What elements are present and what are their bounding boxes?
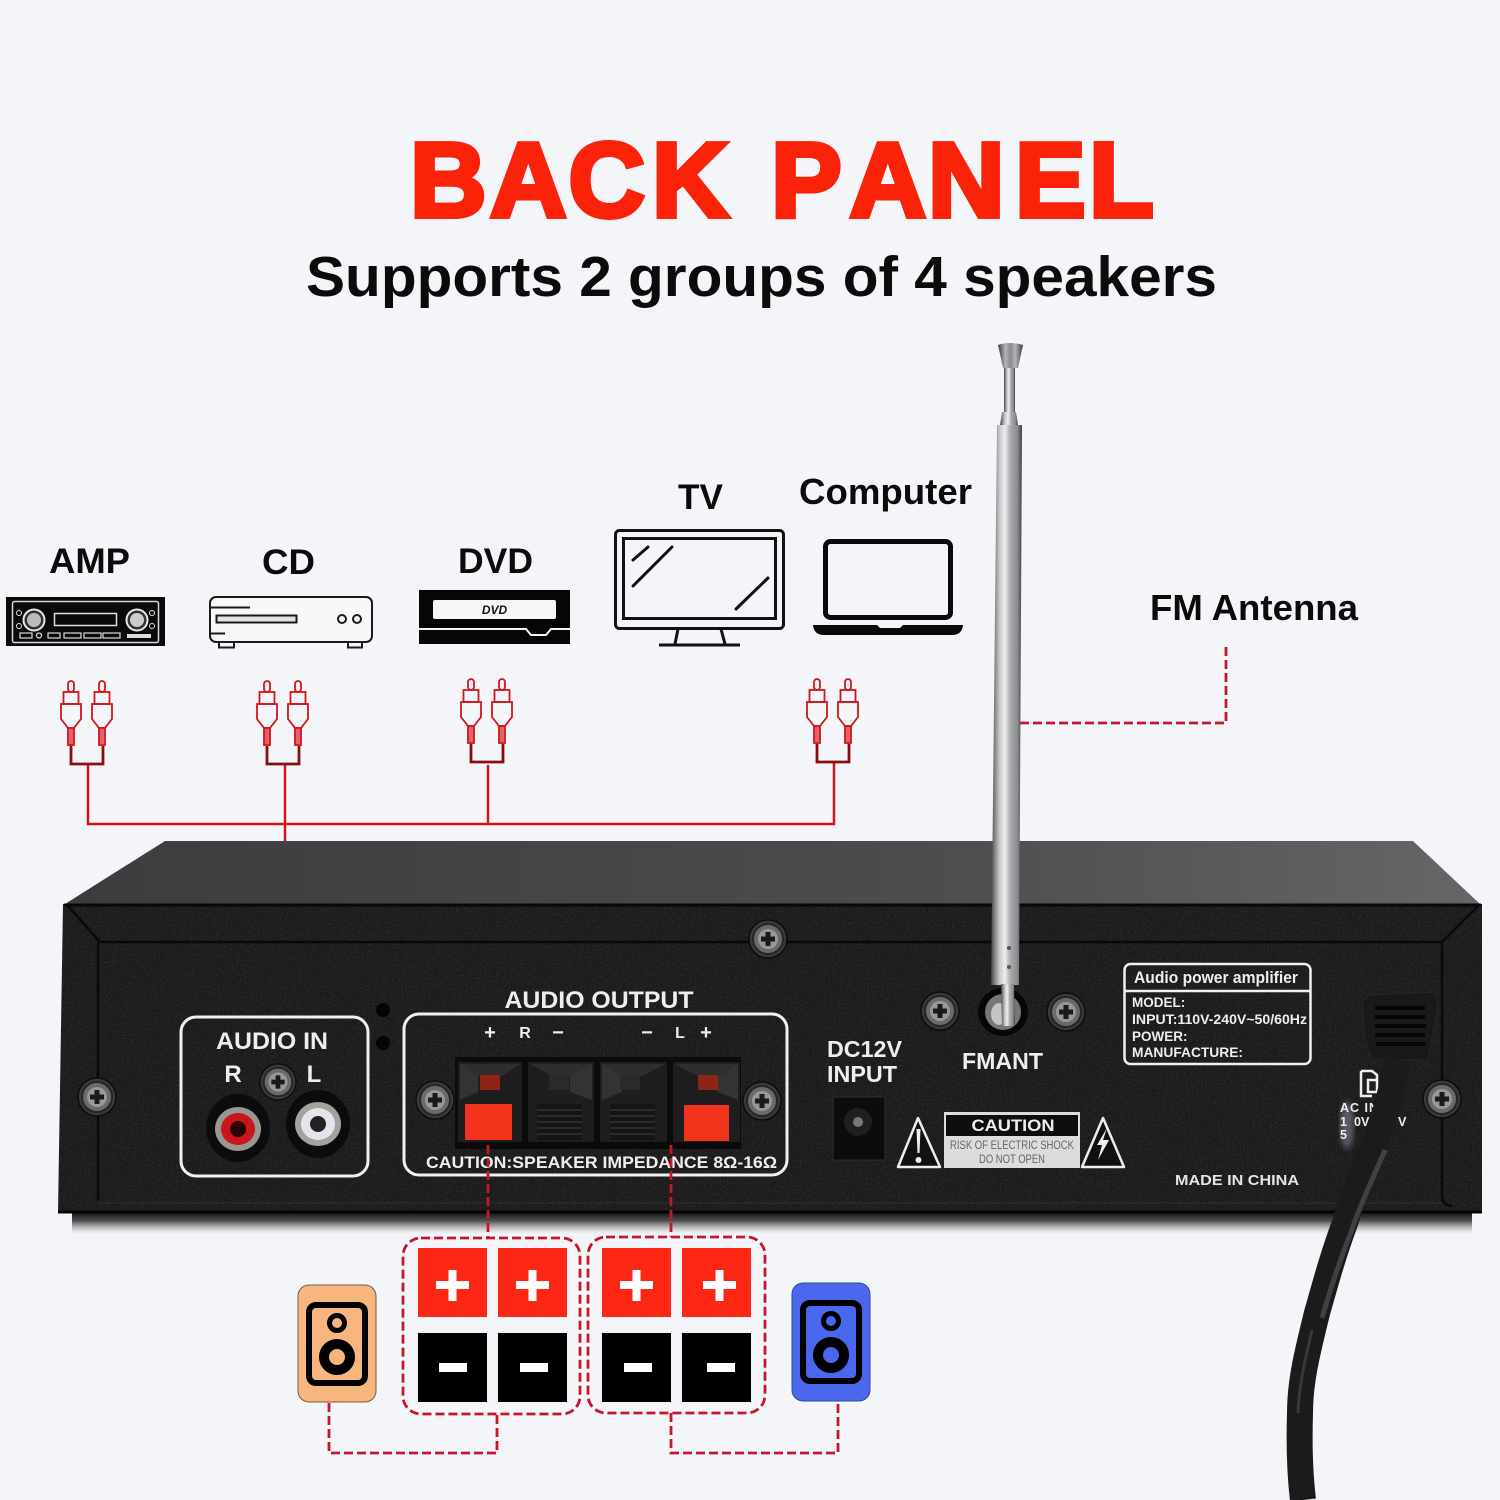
icon: DVD player [419,590,570,644]
panel: audio output: + [700,1022,712,1044]
amplifier rear panel [58,841,1482,1234]
icon: AMP receiver [6,597,165,646]
DC input: INPUT [827,1061,897,1087]
panel: audio output: CAUTION:SPEAKER IMPEDANCE 8Ω-16Ω [426,1153,777,1172]
AC input marking: 0V [1354,1115,1370,1129]
panel: audio output: L [675,1025,685,1042]
DC input [827,1036,903,1160]
FM antenna label: FMANT [962,1048,1043,1074]
AC input marking: 5 [1340,1128,1347,1142]
speaker terminal block [455,1057,741,1149]
dashed: terminal to polarity groups [488,1145,671,1237]
screws [78,920,1461,1120]
icon: laptop [813,542,963,635]
icon: blue speaker [792,1283,870,1401]
label: AMP: AMP [49,542,130,581]
AC input marking: V [1398,1115,1407,1129]
panel: audio in [181,1017,368,1176]
spec label: INPUT:110V-240V~50/60Hz [1132,1012,1307,1027]
icon: RCA plugs CD [257,681,308,745]
title: BACK PANEL [410,122,1154,240]
label: DVD: DVD [458,542,533,581]
subtitle: Supports 2 groups of 4 speakers [306,245,1217,309]
AC input marking: 1 [1340,1115,1347,1129]
caution label [898,1112,1124,1168]
spec label: MODEL: [1132,995,1185,1010]
panel: audio output: R [519,1025,531,1042]
made in china text: MADE IN CHINA [1175,1172,1299,1189]
icon: CD player [210,597,372,648]
icon: TV [616,530,784,645]
antenna [978,343,1028,1036]
spec label: MANUFACTURE: [1132,1045,1243,1060]
dashed: speaker links [329,1401,838,1453]
icon: orange speaker [298,1285,376,1402]
spec label [1124,964,1310,1064]
panel: audio output: − [552,1022,564,1044]
panel: audio output: + [484,1022,496,1044]
label: CD: CD [262,543,315,582]
amplifier top face [65,841,1480,904]
panel: audio output: − [641,1022,653,1044]
group: speaker pair A terminals [403,1238,580,1414]
DC input: DC12V [827,1036,903,1062]
vent holes [376,1003,390,1050]
panel: audio in: L [307,1061,321,1088]
spec label: POWER: [1132,1029,1188,1044]
panel: audio in: AUDIO IN [216,1028,328,1055]
label: Computer: Computer [799,471,972,512]
panel: audio output [404,987,787,1175]
panel: audio in: R [224,1061,242,1088]
group: speaker pair B terminals [588,1237,765,1413]
caution label: CAUTION [972,1116,1054,1135]
icon: RCA plugs Computer [807,679,858,743]
amplifier front face [58,904,1482,1213]
icon: RCA plugs DVD [461,679,512,743]
cable: audio source wiring [71,744,849,1016]
power cord [1298,992,1438,1500]
caution label: RISK OF ELECTRIC SHOCK [950,1138,1074,1152]
label: TV: TV [678,478,724,517]
dashed: FM antenna leader [1020,645,1226,723]
AC input marking: AC IN [1340,1101,1378,1115]
panel: audio output: AUDIO OUTPUT [504,987,694,1014]
icon: DVD player: DVD [482,603,507,617]
label: FM Antenna: FM Antenna [1150,587,1359,628]
spec label: Audio power amplifier [1134,968,1298,987]
icon: RCA plugs AMP [61,681,112,745]
caution label: DO NOT OPEN [979,1152,1045,1166]
AC input marking [1340,1071,1407,1149]
